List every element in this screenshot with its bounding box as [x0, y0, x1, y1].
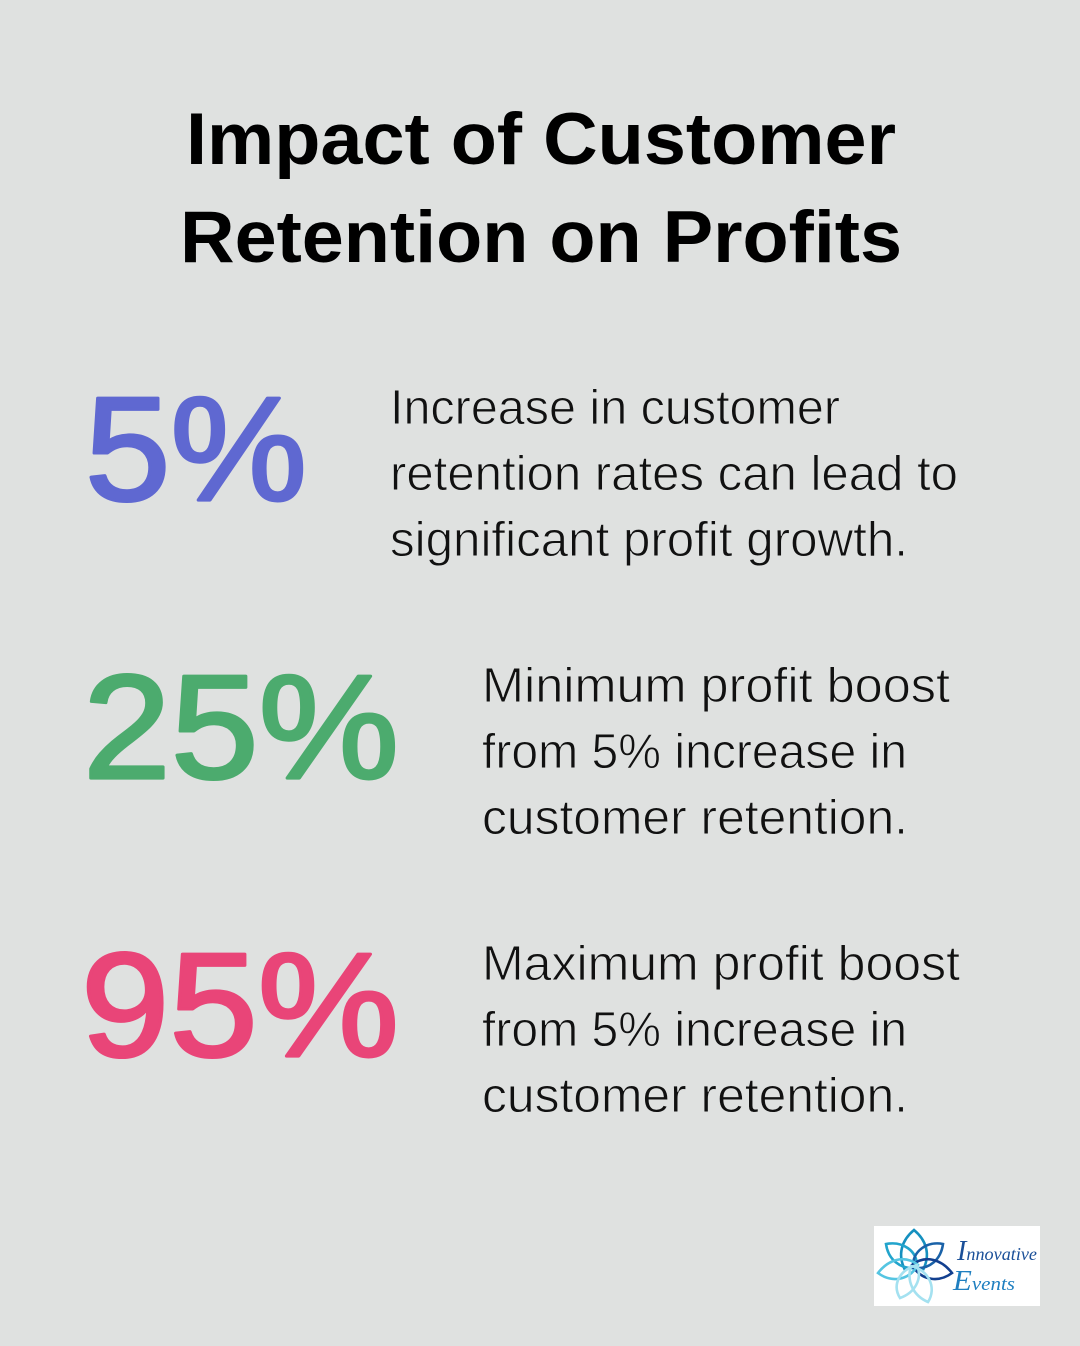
icon: flower: [878, 1230, 952, 1302]
description: 25%: from 5% increase in: [482, 725, 907, 779]
logo wordmark: Events: [952, 1266, 1015, 1297]
panel: 25% statistic: [83, 645, 950, 845]
description: 5%: retention rates can lead to: [390, 447, 958, 501]
panel: 95% statistic: [81, 923, 960, 1123]
description: 95%: [482, 937, 960, 1123]
logo: Innovative Events: [874, 1226, 1040, 1306]
description: 5%: Increase in customer: [390, 381, 840, 435]
title: Retention on Profits: [180, 197, 902, 278]
description: 25%: [482, 659, 950, 845]
description: 5%: significant profit growth.: [390, 513, 908, 567]
description: 25%: customer retention.: [482, 791, 908, 845]
stat number: 25%: 25%: [83, 645, 399, 810]
description: 95%: customer retention.: [482, 1069, 908, 1123]
description: 95%: Maximum profit boost: [482, 937, 960, 991]
stat number: 95%: 95%: [81, 923, 399, 1088]
description: 5%: [390, 381, 958, 567]
stat number: 5%: 5%: [85, 367, 307, 532]
title: [180, 99, 902, 278]
description: 25%: Minimum profit boost: [482, 659, 950, 713]
panel: 5% statistic: [85, 367, 958, 567]
logo wordmark: [952, 1236, 1037, 1297]
title: Impact of Customer: [186, 99, 896, 180]
description: 95%: from 5% increase in: [482, 1003, 907, 1057]
logo wordmark: Innovative: [956, 1236, 1037, 1267]
